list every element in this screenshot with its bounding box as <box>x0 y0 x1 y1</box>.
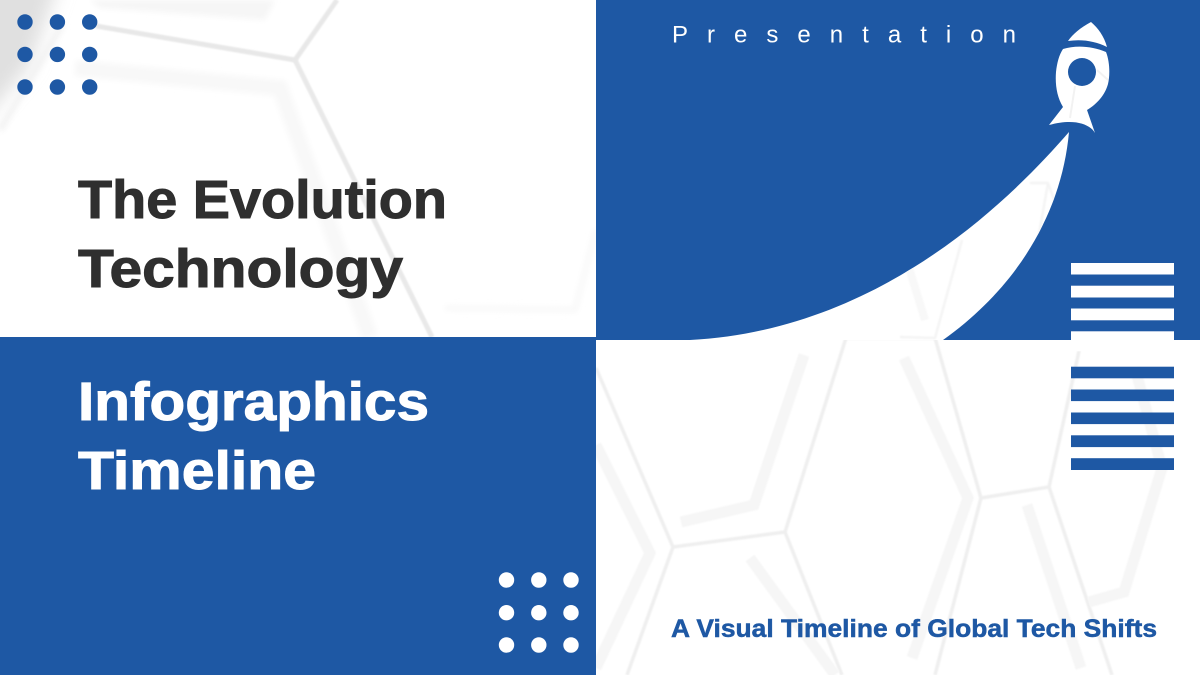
stripes: white <box>1071 263 1174 351</box>
icon: rocket trail swoosh <box>690 132 1069 340</box>
title: The Evolution Technology: The Evolution <box>78 170 447 230</box>
heading: Infographics Timeline: Timeline <box>78 441 316 501</box>
panel: blue top-right <box>596 0 1200 340</box>
icon: rocket <box>1049 22 1109 133</box>
dots: top-left blue grid <box>17 14 97 95</box>
title: The Evolution Technology: Technology <box>78 239 403 299</box>
stripes: blue <box>1071 367 1174 470</box>
panel: blue bottom-left <box>0 337 596 675</box>
subtitle: A Visual Timeline of Global Tech Shifts <box>671 615 1157 643</box>
dots: bottom-right white grid <box>499 572 579 653</box>
heading: Infographics Timeline: Infographics <box>78 372 429 432</box>
label: Presentation: Presentation <box>672 22 1016 48</box>
heading: Infographics Timeline <box>78 372 429 501</box>
title: The Evolution Technology <box>78 170 447 299</box>
